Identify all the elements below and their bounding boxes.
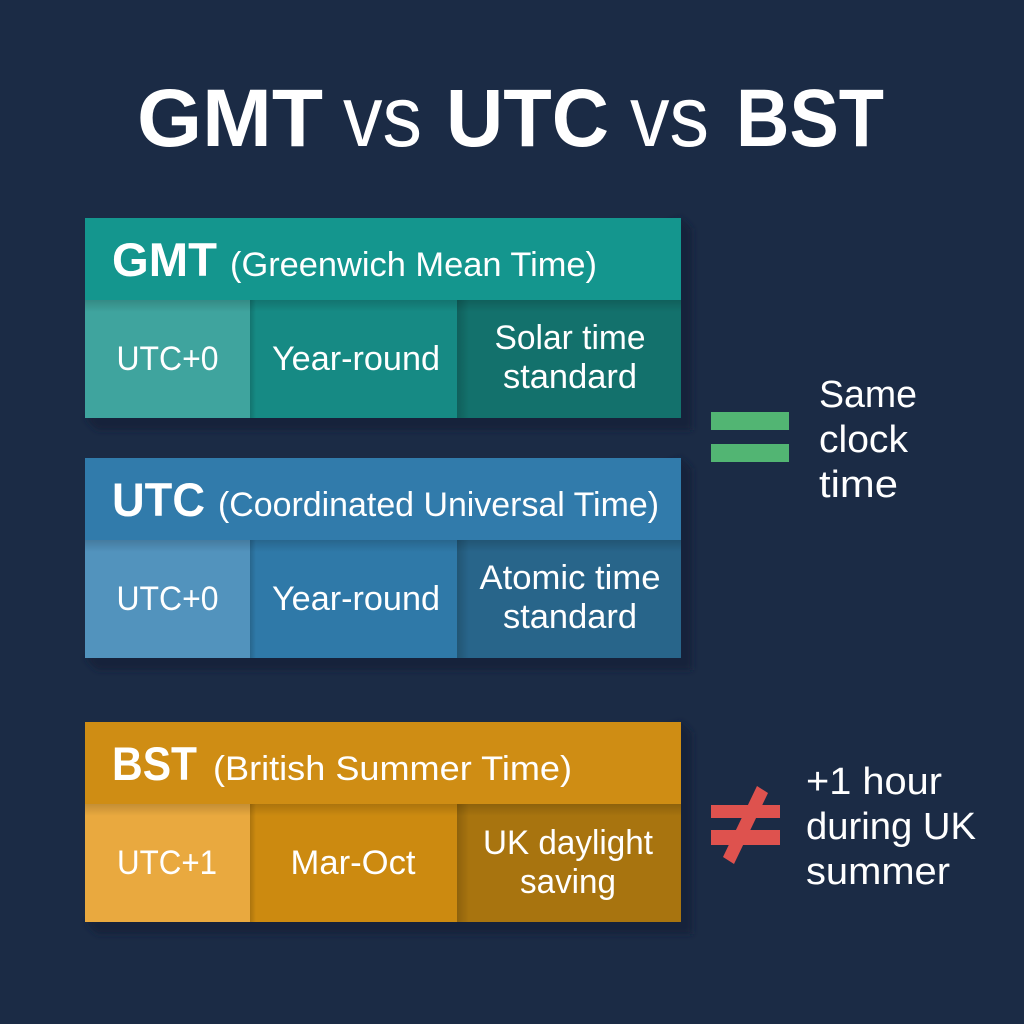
BST cell: offset: UTC+1 (117, 844, 217, 882)
GMT cell: offset (85, 300, 250, 418)
text: same clock time (819, 374, 917, 506)
UTC header: (Coordinated Universal Time) (218, 486, 659, 524)
GMT header (85, 218, 681, 300)
title (137, 69, 884, 165)
UTC cell: offset: UTC+0 (116, 580, 218, 618)
text: +1 hour during UK summer (806, 761, 976, 893)
panel: BST (85, 722, 692, 934)
GMT cell: period: Year-round (272, 340, 440, 378)
UTC cell: period: Year-round (272, 580, 440, 618)
text: +1 hour during UK summer: +1 hour (806, 761, 942, 803)
GMT cell: period (250, 300, 457, 418)
BST header (85, 722, 681, 804)
UTC cell: standard: standard (503, 598, 637, 636)
icon: equals sign (711, 412, 789, 462)
GMT header: GMT (112, 233, 217, 286)
BST cell: standard: saving (520, 863, 616, 901)
text: same clock time: clock (819, 419, 909, 461)
BST cell: standard: UK daylight (483, 824, 654, 862)
GMT cell: standard (457, 300, 681, 418)
BST cell: period (250, 804, 457, 922)
title: BST (736, 73, 884, 164)
title: GMT (137, 73, 323, 164)
text: same clock time: time (819, 464, 898, 506)
BST header: BST (112, 737, 197, 790)
BST cell: offset (85, 804, 250, 922)
GMT cell: standard: standard (503, 358, 637, 396)
GMT cell: standard: Solar time (494, 319, 646, 357)
text: +1 hour during UK summer: during UK (806, 806, 976, 848)
UTC header (85, 458, 681, 540)
UTC cell: standard: Atomic time (480, 559, 660, 597)
title: vs (630, 69, 709, 165)
BST header: (British Summer Time) (213, 750, 572, 788)
title: UTC (446, 73, 609, 164)
panel: UTC (85, 458, 692, 670)
text: +1 hour during UK summer: summer (806, 851, 950, 893)
UTC cell: period (250, 540, 457, 658)
UTC header: UTC (112, 473, 205, 526)
BST cell: standard (457, 804, 681, 922)
icon: not equal sign (711, 786, 780, 864)
text: same clock time: Same (819, 374, 917, 416)
panel: GMT (85, 218, 692, 430)
GMT header: (Greenwich Mean Time) (230, 246, 597, 284)
UTC cell: standard (457, 540, 681, 658)
UTC cell: offset (85, 540, 250, 658)
BST cell: period: Mar-Oct (290, 844, 416, 882)
GMT cell: offset: UTC+0 (116, 340, 218, 378)
title: vs (343, 69, 422, 165)
